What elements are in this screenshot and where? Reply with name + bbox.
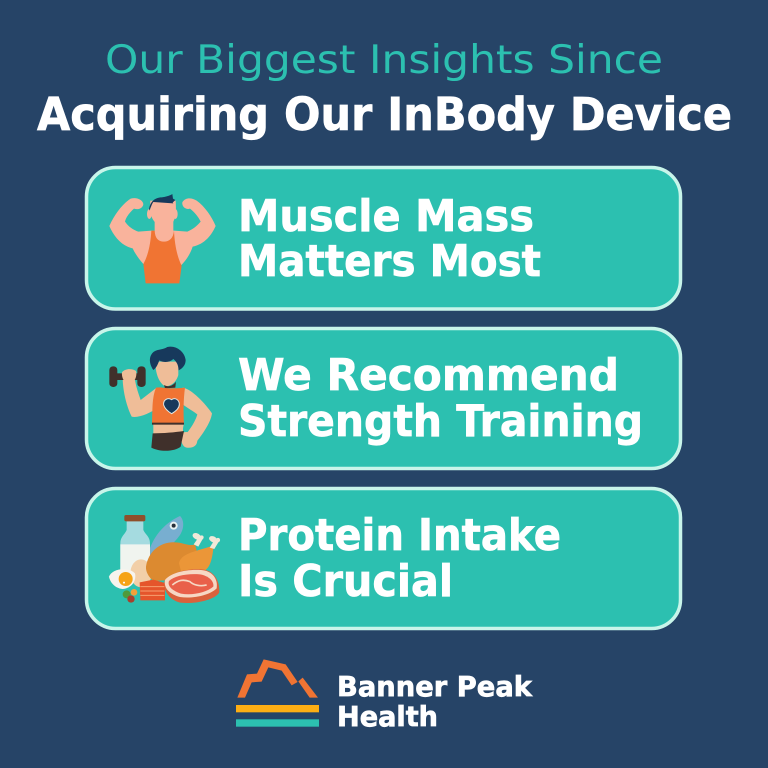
icon: flexing man xyxy=(109,194,216,283)
logo: Banner Peak Health xyxy=(236,659,533,733)
title: Our Biggest Insights Since xyxy=(105,38,663,83)
text: muscle mass xyxy=(238,191,541,287)
logo wordmark xyxy=(337,670,533,733)
logo wordmark: Health xyxy=(337,700,438,733)
title xyxy=(37,38,732,141)
title: Acquiring Our InBody Device xyxy=(37,88,732,141)
text: strength training: Strength Training xyxy=(238,396,643,447)
text: strength training: We Recommend xyxy=(238,350,619,401)
panel: strength training xyxy=(86,328,680,468)
text: protein intake: Protein Intake xyxy=(238,510,561,561)
icon: mountain with stripes xyxy=(236,659,319,727)
panel: muscle mass xyxy=(86,168,680,309)
text: muscle mass: Muscle Mass xyxy=(238,191,534,242)
text: protein intake xyxy=(238,510,561,607)
panel: protein intake xyxy=(86,488,680,628)
icon: protein foods xyxy=(109,515,220,603)
logo wordmark: Banner Peak xyxy=(337,670,533,703)
text: muscle mass: Matters Most xyxy=(238,236,541,287)
icon: woman with dumbbell xyxy=(109,347,212,451)
text: protein intake: Is Crucial xyxy=(238,556,453,607)
text: strength training xyxy=(238,350,643,447)
